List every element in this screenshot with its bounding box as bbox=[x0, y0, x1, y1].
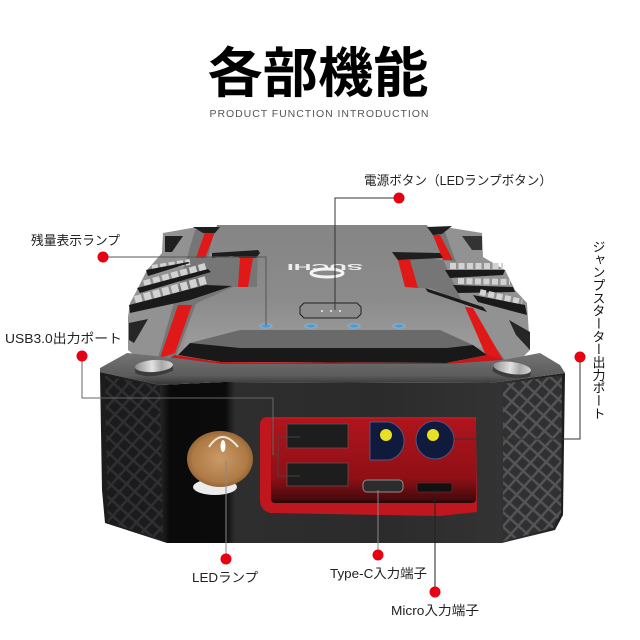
label: battery lamps: 残量表示ランプ bbox=[31, 233, 120, 248]
title: 各部機能 bbox=[208, 44, 428, 104]
left grip texture bbox=[105, 376, 163, 540]
leader: jump starter bbox=[452, 352, 586, 439]
battery indicator lamps bbox=[259, 323, 406, 329]
right grip texture bbox=[503, 375, 562, 541]
power button bbox=[300, 303, 361, 318]
red trim under vent bbox=[165, 355, 503, 366]
jump starter device bbox=[100, 225, 565, 543]
black front vent bbox=[178, 343, 487, 363]
shell silhouette bbox=[128, 227, 530, 360]
label: LED: LEDランプ bbox=[192, 570, 258, 585]
brand logo bbox=[287, 262, 363, 277]
front ramp bbox=[190, 330, 473, 349]
USB ports bbox=[287, 424, 348, 448]
leader: battery lamps bbox=[98, 252, 266, 325]
black corner bars bbox=[193, 226, 452, 260]
label: Micro: Micro入力端子 bbox=[391, 603, 479, 618]
label: Type-C: Type-C入力端子 bbox=[330, 566, 427, 581]
left screw bbox=[135, 359, 174, 377]
label: power button: 電源ボタン（LEDランプボタン） bbox=[364, 173, 552, 188]
leader: power button bbox=[335, 192, 404, 310]
side vents bbox=[129, 319, 148, 343]
leader: Micro bbox=[430, 490, 440, 598]
device top shell bbox=[128, 225, 530, 366]
front housing bbox=[100, 353, 565, 543]
port panel bbox=[260, 417, 477, 516]
LED lamp bbox=[187, 431, 253, 495]
left grille bbox=[129, 262, 232, 313]
leader: Type-C bbox=[372, 490, 384, 560]
subtitle: PRODUCT FUNCTION INTRODUCTION bbox=[210, 108, 428, 120]
label: USB: USB3.0出力ポート bbox=[5, 331, 122, 346]
red side accents bbox=[160, 232, 503, 360]
Micro USB port bbox=[417, 483, 452, 492]
label: jump starter: ジャンプスターター出力ポート bbox=[590, 240, 606, 420]
brand logo: SUCHI bbox=[287, 262, 363, 271]
top plate bbox=[183, 225, 487, 347]
right screw bbox=[492, 359, 532, 381]
leader: USB ports bbox=[76, 350, 300, 476]
recessed side channels bbox=[158, 230, 258, 358]
leader: LED bbox=[220, 460, 232, 564]
right grille bbox=[425, 266, 527, 315]
Type-C port bbox=[363, 480, 403, 492]
jump starter sockets bbox=[370, 421, 454, 460]
